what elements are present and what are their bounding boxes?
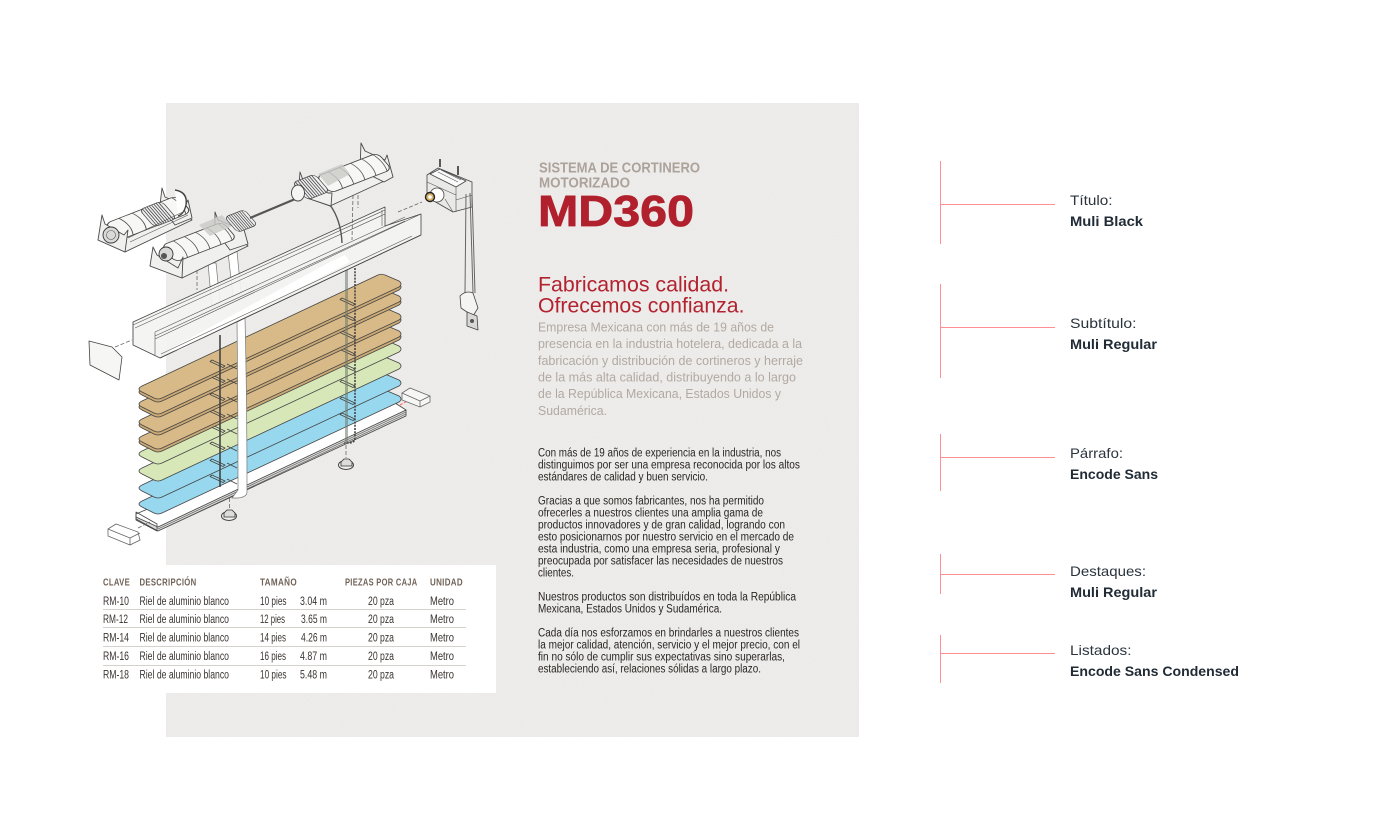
- body copy: [538, 448, 800, 676]
- paragraph 1: [538, 448, 800, 484]
- blue slats: [139, 373, 401, 514]
- table header: CLAVE: [103, 578, 130, 588]
- row RM-10: Riel de aluminio blanco: [140, 596, 229, 608]
- callout: parrafo: [940, 434, 1158, 491]
- callout: destaques: Destaques:: [1070, 563, 1146, 579]
- green slats: [139, 339, 401, 481]
- paragraph 2: clientes.: [538, 568, 574, 580]
- callout: parrafo: Párrafo:: [1070, 445, 1123, 461]
- table header: [103, 576, 463, 588]
- row RM-18: 10 pies: [260, 670, 287, 682]
- left end cap: [89, 341, 122, 380]
- row RM-16: 4.87 m: [300, 651, 327, 663]
- row RM-14: 20 pza: [368, 632, 394, 644]
- intro paragraph: Empresa Mexicana con más de 19 años de: [538, 320, 774, 334]
- row RM-14: RM-14: [103, 632, 129, 644]
- row RM-10: 10 pies: [260, 596, 287, 608]
- background panel: [166, 103, 859, 737]
- drive shaft: [250, 197, 300, 218]
- row RM-14: 14 pies: [260, 632, 286, 644]
- callout: titulo: Título:: [1070, 192, 1112, 208]
- intro paragraph: fabricación y distribución de cortineros y herraje: [538, 353, 803, 368]
- intro paragraph: Sudamérica.: [538, 403, 607, 418]
- paragraph 4: la mejor calidad, atención, servicio y el mejor precio, con el: [538, 640, 800, 652]
- table header: PIEZAS POR CAJA: [345, 578, 418, 588]
- paragraph 1: distinguimos por ser una empresa reconocida por los altos: [538, 460, 800, 472]
- row RM-12: Riel de aluminio blanco: [140, 614, 229, 626]
- control cord and pulley: [460, 193, 478, 330]
- row RM-12: 12 pies: [260, 614, 285, 626]
- intro paragraph: [538, 320, 803, 418]
- callout: destaques: [940, 554, 1158, 600]
- product table: [72, 565, 496, 693]
- paragraph 4: Cada día nos esforzamos en brindarles a nuestros clientes: [538, 628, 799, 640]
- paragraph 1: Con más de 19 años de experiencia en la industria, nos: [538, 448, 781, 460]
- callout: titulo: Muli Black: [1070, 213, 1143, 229]
- paragraph 2: ofrecerles a nuestros clientes una amplia gama de: [538, 508, 763, 520]
- callout: listados: Listados:: [1070, 642, 1132, 658]
- row RM-16: 16 pies: [260, 651, 286, 663]
- row RM-18: 20 pza: [368, 670, 394, 682]
- callout: listados: [940, 635, 1239, 683]
- callout: titulo: [940, 161, 1143, 244]
- bottom rail: [136, 403, 406, 531]
- motor centre: [150, 209, 257, 278]
- row RM-14: 4.26 m: [301, 632, 327, 644]
- callout: parrafo: Encode Sans: [1070, 466, 1158, 482]
- row RM-16: RM-16: [103, 651, 129, 663]
- row RM-16: [103, 651, 454, 663]
- row RM-12: 3.65 m: [301, 614, 327, 626]
- table header: TAMAÑO: [260, 576, 297, 588]
- row RM-10: 3.04 m: [300, 596, 327, 608]
- title eyebrow: MOTORIZADO: [539, 176, 630, 192]
- row RM-16: Metro: [430, 651, 454, 663]
- headrail: [133, 207, 421, 358]
- row RM-18: 5.48 m: [300, 670, 327, 682]
- paragraph 1: estándares de calidad y buen servicio.: [538, 472, 708, 484]
- row RM-12: [103, 614, 454, 626]
- hex nut left: [222, 510, 236, 520]
- motor right: [292, 143, 393, 206]
- row RM-10: Metro: [430, 596, 454, 608]
- row RM-10: 20 pza: [368, 596, 394, 608]
- paragraph 3: Nuestros productos son distribuídos en toda la República: [538, 592, 797, 604]
- callout: subtitulo: Subtítulo:: [1070, 315, 1136, 331]
- paragraph 2: esto posicionarnos por nuestro servicio en el mercado de: [538, 532, 794, 544]
- paragraph 2: esta industria, como una empresa seria, profesional y: [538, 544, 780, 556]
- bottom-left end cap: [108, 524, 140, 545]
- white tape: [208, 241, 247, 498]
- subtitle: [538, 272, 744, 318]
- row RM-10: RM-10: [103, 596, 129, 608]
- callout: subtitulo: [940, 284, 1158, 378]
- row RM-18: [103, 670, 454, 682]
- row RM-14: Metro: [430, 632, 454, 644]
- subtitle: Fabricamos calidad.: [538, 272, 729, 296]
- row RM-18: Metro: [430, 670, 454, 682]
- row RM-12: Metro: [430, 614, 454, 626]
- row RM-16: 20 pza: [368, 651, 394, 663]
- callout: listados: Encode Sans Condensed: [1070, 663, 1239, 679]
- row RM-18: RM-18: [103, 670, 129, 682]
- row RM-12: 20 pza: [368, 614, 394, 626]
- row RM-12: RM-12: [103, 614, 128, 626]
- upper cords: [115, 195, 422, 528]
- title eyebrow: SISTEMA DE CORTINERO: [539, 160, 700, 176]
- paragraph 4: estableciendo así, relaciones sólidas a largo plazo.: [538, 664, 761, 676]
- row RM-10: [103, 596, 454, 608]
- paragraph 4: fin no sólo de cumplir sus expectativas sino superarlas,: [538, 652, 785, 664]
- row RM-18: Riel de aluminio blanco: [140, 670, 229, 682]
- row RM-16: Riel de aluminio blanco: [140, 651, 229, 663]
- title eyebrow: [539, 160, 700, 192]
- right end cap: [402, 388, 430, 407]
- paragraph 3: [538, 592, 797, 616]
- hex nut right: [338, 459, 354, 470]
- table header: UNIDAD: [430, 578, 463, 588]
- paragraph 3: Mexicana, Estados Unidos y Sudamérica.: [538, 604, 722, 616]
- gearbox: [426, 159, 472, 212]
- callout: subtitulo: Muli Regular: [1070, 336, 1158, 352]
- wood slats: [139, 274, 401, 452]
- intro paragraph: presencia en la industria hotelera, dedicada a la: [538, 336, 803, 351]
- exploded blind illustration: [89, 143, 478, 545]
- row RM-14: Riel de aluminio blanco: [140, 632, 229, 644]
- subtitle: Ofrecemos confianza.: [538, 294, 744, 318]
- paragraph 2: productos innovadores y de gran calidad, logrando con: [538, 520, 785, 532]
- paragraph 2: preocupada por satisfacer las necesidades de nuestros: [538, 556, 783, 568]
- paragraph 2: [538, 496, 794, 580]
- intro paragraph: de la República Mexicana, Estados Unidos y: [538, 386, 781, 401]
- ladder cords: [220, 268, 355, 487]
- intro paragraph: de la más alta calidad, distribuyendo a lo largo: [538, 370, 796, 384]
- paragraph 2: Gracias a que somos fabricantes, nos ha permitido: [538, 496, 764, 508]
- motor left: [98, 188, 192, 252]
- table header: DESCRIPCIÓN: [140, 576, 196, 588]
- row RM-14: [103, 632, 454, 644]
- title MD360: MD360: [538, 187, 694, 236]
- paragraph 4: [538, 628, 800, 676]
- callout: destaques: Muli Regular: [1070, 584, 1158, 600]
